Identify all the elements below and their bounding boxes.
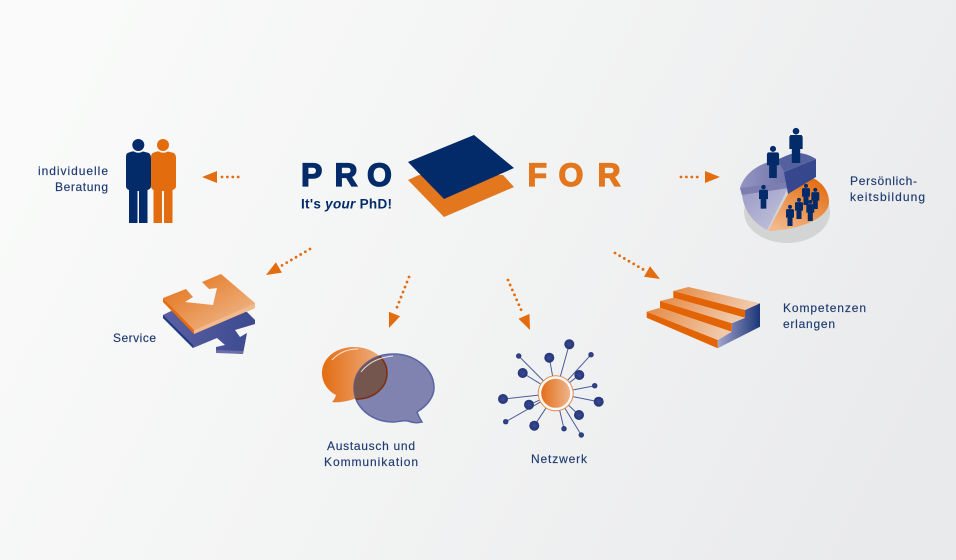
tagline: It's your PhD! [301, 196, 392, 212]
figure: medium person [767, 146, 779, 178]
bubble: orange [322, 347, 387, 402]
figure: left person [759, 185, 768, 209]
arrow: to Persönlichkeitsbildung [681, 171, 720, 183]
arrow: to Netzwerk [508, 280, 530, 330]
label: Kompetenzen erlangen: erlangen [783, 317, 835, 331]
arrow: to Austausch und Kommunikation [389, 277, 409, 328]
logo text: FOR: FOR [528, 157, 621, 193]
arrow: to Kompetenzen erlangen [615, 253, 660, 279]
logo text: PRO: PRO [301, 157, 392, 193]
icon: service arrows [163, 274, 255, 354]
icon: pie chart with people [740, 128, 830, 243]
label: individuelle Beratung: Beratung [55, 180, 108, 194]
icon: stairs [647, 287, 760, 348]
bubble overlap [354, 356, 388, 400]
label: Persönlichkeitsbildung: Persönlich- [850, 174, 917, 188]
figures: group of people [786, 184, 819, 226]
bubble: purple [354, 354, 434, 423]
icon: network [498, 339, 604, 438]
label: Persönlichkeitsbildung: keitsbildung [850, 190, 925, 204]
arrow: to Service [266, 249, 310, 275]
label: Service: Service [113, 331, 156, 345]
figure: tall person [789, 128, 803, 163]
label: Kompetenzen erlangen: Kompetenzen [783, 301, 866, 315]
logo icon: stacked sheets [408, 135, 514, 217]
label: Austausch und Kommunikation: Austausch und [327, 439, 415, 453]
logo: PROFOR [301, 135, 621, 217]
label: individuelle Beratung: individuelle [38, 164, 108, 178]
arrow: to individuelle Beratung [202, 171, 242, 183]
icon: speech bubbles [322, 347, 434, 423]
label: Austausch und Kommunikation: Kommunikation [324, 455, 418, 469]
icon: two people [126, 139, 176, 223]
label: Netzwerk: Netzwerk [531, 452, 588, 466]
